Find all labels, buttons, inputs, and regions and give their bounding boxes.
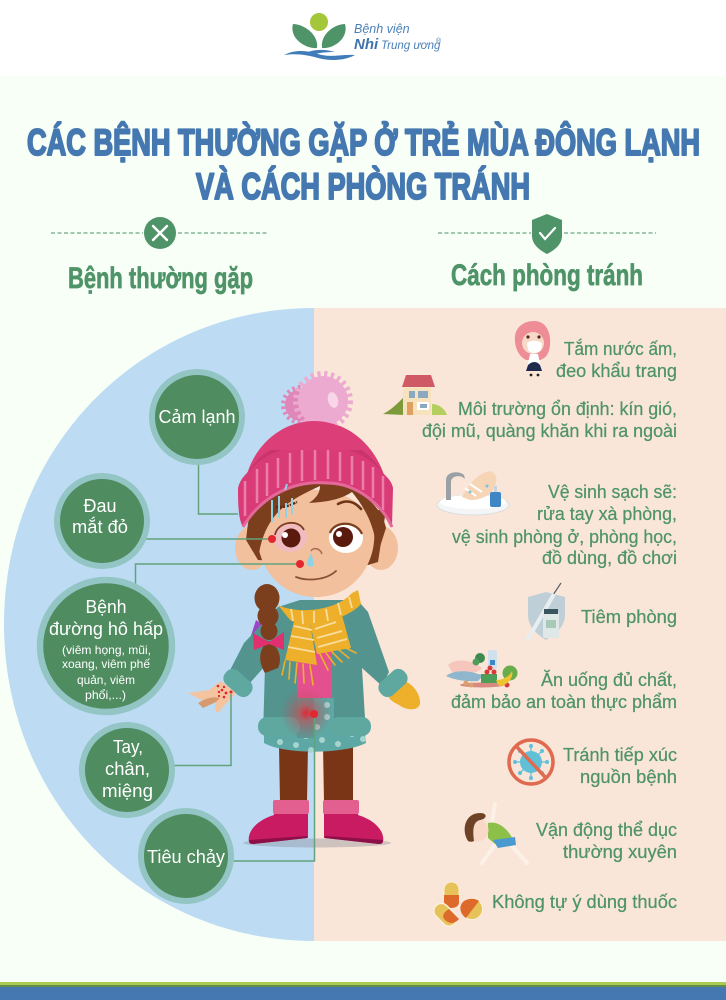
icon: cross in circle with dashed rule xyxy=(51,217,269,249)
braid with bow xyxy=(253,584,284,673)
icon: house xyxy=(383,375,447,415)
text: Ăn uống đủ chất: Ăn uống đủ chất, xyxy=(541,670,677,690)
heading: Cách phòng tránh: Cách phòng tránh xyxy=(451,259,643,292)
icon: hand washing sink xyxy=(437,471,509,515)
logo: Bệnh viện Nhi Trung ương: Trung ương xyxy=(381,40,441,52)
text: Môi trường ổn định: Môi trường ổn định: kín gió, xyxy=(458,399,677,419)
title: VÀ CÁCH PHÒNG TRÁNH xyxy=(196,165,530,207)
fever sweat lines xyxy=(272,484,292,522)
purple patch xyxy=(248,620,263,660)
disease: Tay chân miệng: Tay, xyxy=(113,737,143,757)
hat xyxy=(238,421,393,527)
disease: Tiêu chảy: Tiêu chảy xyxy=(147,847,225,867)
text: Vệ sinh sạch sẽ: rửa tay xà phòng, xyxy=(537,504,677,524)
icon: no virus sign xyxy=(509,740,553,784)
text: Tránh tiếp xúc xyxy=(563,745,677,787)
connector lines xyxy=(136,460,318,861)
text: Không tự ý dùng thuốc: Không tự ý dùng thuốc xyxy=(492,892,677,912)
coat xyxy=(226,600,389,735)
text: Vệ sinh sạch sẽ: Vệ sinh sạch sẽ: xyxy=(548,482,677,502)
heading: Bệnh thường gặp: Bệnh thường gặp xyxy=(68,262,253,295)
logo: Bệnh viện Nhi Trung ương xyxy=(284,13,442,60)
text: Ăn uống đủ chất xyxy=(451,670,677,712)
text: Vệ sinh sạch sẽ: đồ dùng, đồ chơi xyxy=(542,548,677,568)
face xyxy=(257,490,374,597)
left hand with rash xyxy=(188,681,236,712)
disease: Đau mắt đỏ: mắt đỏ xyxy=(72,516,128,537)
text: Tắm nước ấm xyxy=(556,338,677,381)
healthy right eye xyxy=(329,523,363,553)
disease: Đau mắt đỏ xyxy=(57,476,147,566)
icon: girl with face mask xyxy=(515,321,550,376)
footer stripes xyxy=(0,982,726,1000)
disease: Cảm lạnh: Cảm lạnh xyxy=(158,407,236,427)
disease: Tay chân miệng: chân, xyxy=(105,759,150,779)
ears xyxy=(235,526,269,570)
text: Vận động thể dục: thường xuyên xyxy=(563,842,677,862)
boots shadow xyxy=(243,838,391,848)
text: Tắm nước ấm: đeo khẩu trang xyxy=(556,361,677,381)
right mitten xyxy=(389,681,420,709)
disease: Bệnh đường hô hấp xyxy=(40,580,172,712)
icon: pills xyxy=(431,882,482,929)
text: Tránh tiếp xúc: nguồn bệnh xyxy=(580,767,677,787)
text: Vệ sinh sạch sẽ xyxy=(452,482,677,568)
text: Ăn uống đủ chất: đảm bảo an toàn thực phẩm xyxy=(451,692,677,712)
disease: Cảm lạnh xyxy=(152,372,242,462)
text: Môi trường ổn định: đội mũ, quàng khăn khi ra ngoài xyxy=(422,421,677,441)
pompom xyxy=(246,375,385,478)
panel: prevention background xyxy=(314,308,726,941)
logo: Bệnh viện Nhi Trung ương: ® xyxy=(436,37,442,45)
disease: Tiêu chảy xyxy=(141,811,231,901)
disease: Tay chân miệng: miệng xyxy=(102,781,153,801)
hair fringe xyxy=(246,482,386,560)
disease: Bệnh đường hô hấp: xoang, viêm phế xyxy=(62,657,150,671)
logo: Bệnh viện Nhi Trung ương: Nhi xyxy=(354,36,379,53)
icon: shield with check and dashed rule xyxy=(438,214,656,254)
stomach rash glow xyxy=(280,687,332,739)
legs xyxy=(279,745,353,802)
hair back xyxy=(246,510,386,565)
eyebrows xyxy=(338,502,361,509)
disease: Bệnh đường hô hấp: (viêm họng, mũi, xyxy=(62,643,151,657)
boots xyxy=(249,800,383,844)
coat fur trim xyxy=(220,666,411,736)
pink shirt xyxy=(297,650,332,698)
disease: Bệnh đường hô hấp: phổi,...) xyxy=(85,688,126,702)
disease: Đau mắt đỏ: Đau xyxy=(84,496,116,516)
text: Tiêm phòng: Tiêm phòng xyxy=(581,607,677,627)
sick left eye xyxy=(273,522,307,552)
disease: Tay chân miệng xyxy=(82,725,172,815)
child illustration xyxy=(188,375,420,848)
icon: healthy food xyxy=(446,650,518,688)
text: Môi trường ổn định xyxy=(422,399,677,441)
disease: Bệnh đường hô hấp: đường hô hấp xyxy=(49,619,163,639)
disease: Bệnh đường hô hấp: Bệnh xyxy=(86,597,126,617)
hat top over pompom xyxy=(262,421,368,450)
logo: Bệnh viện Nhi Trung ương: Bệnh viện xyxy=(354,22,410,36)
nose with drip xyxy=(307,549,322,567)
mouth xyxy=(296,571,336,579)
skirt with dots xyxy=(264,698,366,753)
text: Vận động thể dục: Vận động thể dục xyxy=(536,820,677,840)
panel: diseases half circle xyxy=(4,308,314,941)
icon: vaccine shield and syringe xyxy=(527,583,565,640)
scarf xyxy=(278,590,361,685)
disease: Bệnh đường hô hấp: quản, viêm xyxy=(77,673,135,687)
icon: child exercising xyxy=(465,804,527,863)
text: Tránh tiếp xúc: Tránh tiếp xúc xyxy=(563,745,677,765)
text: Vận động thể dục xyxy=(536,820,677,862)
text: Vệ sinh sạch sẽ: vệ sinh phòng ở, phòng học, xyxy=(452,527,677,547)
title xyxy=(27,121,700,207)
text: Tắm nước ấm: Tắm nước ấm, xyxy=(564,338,677,359)
